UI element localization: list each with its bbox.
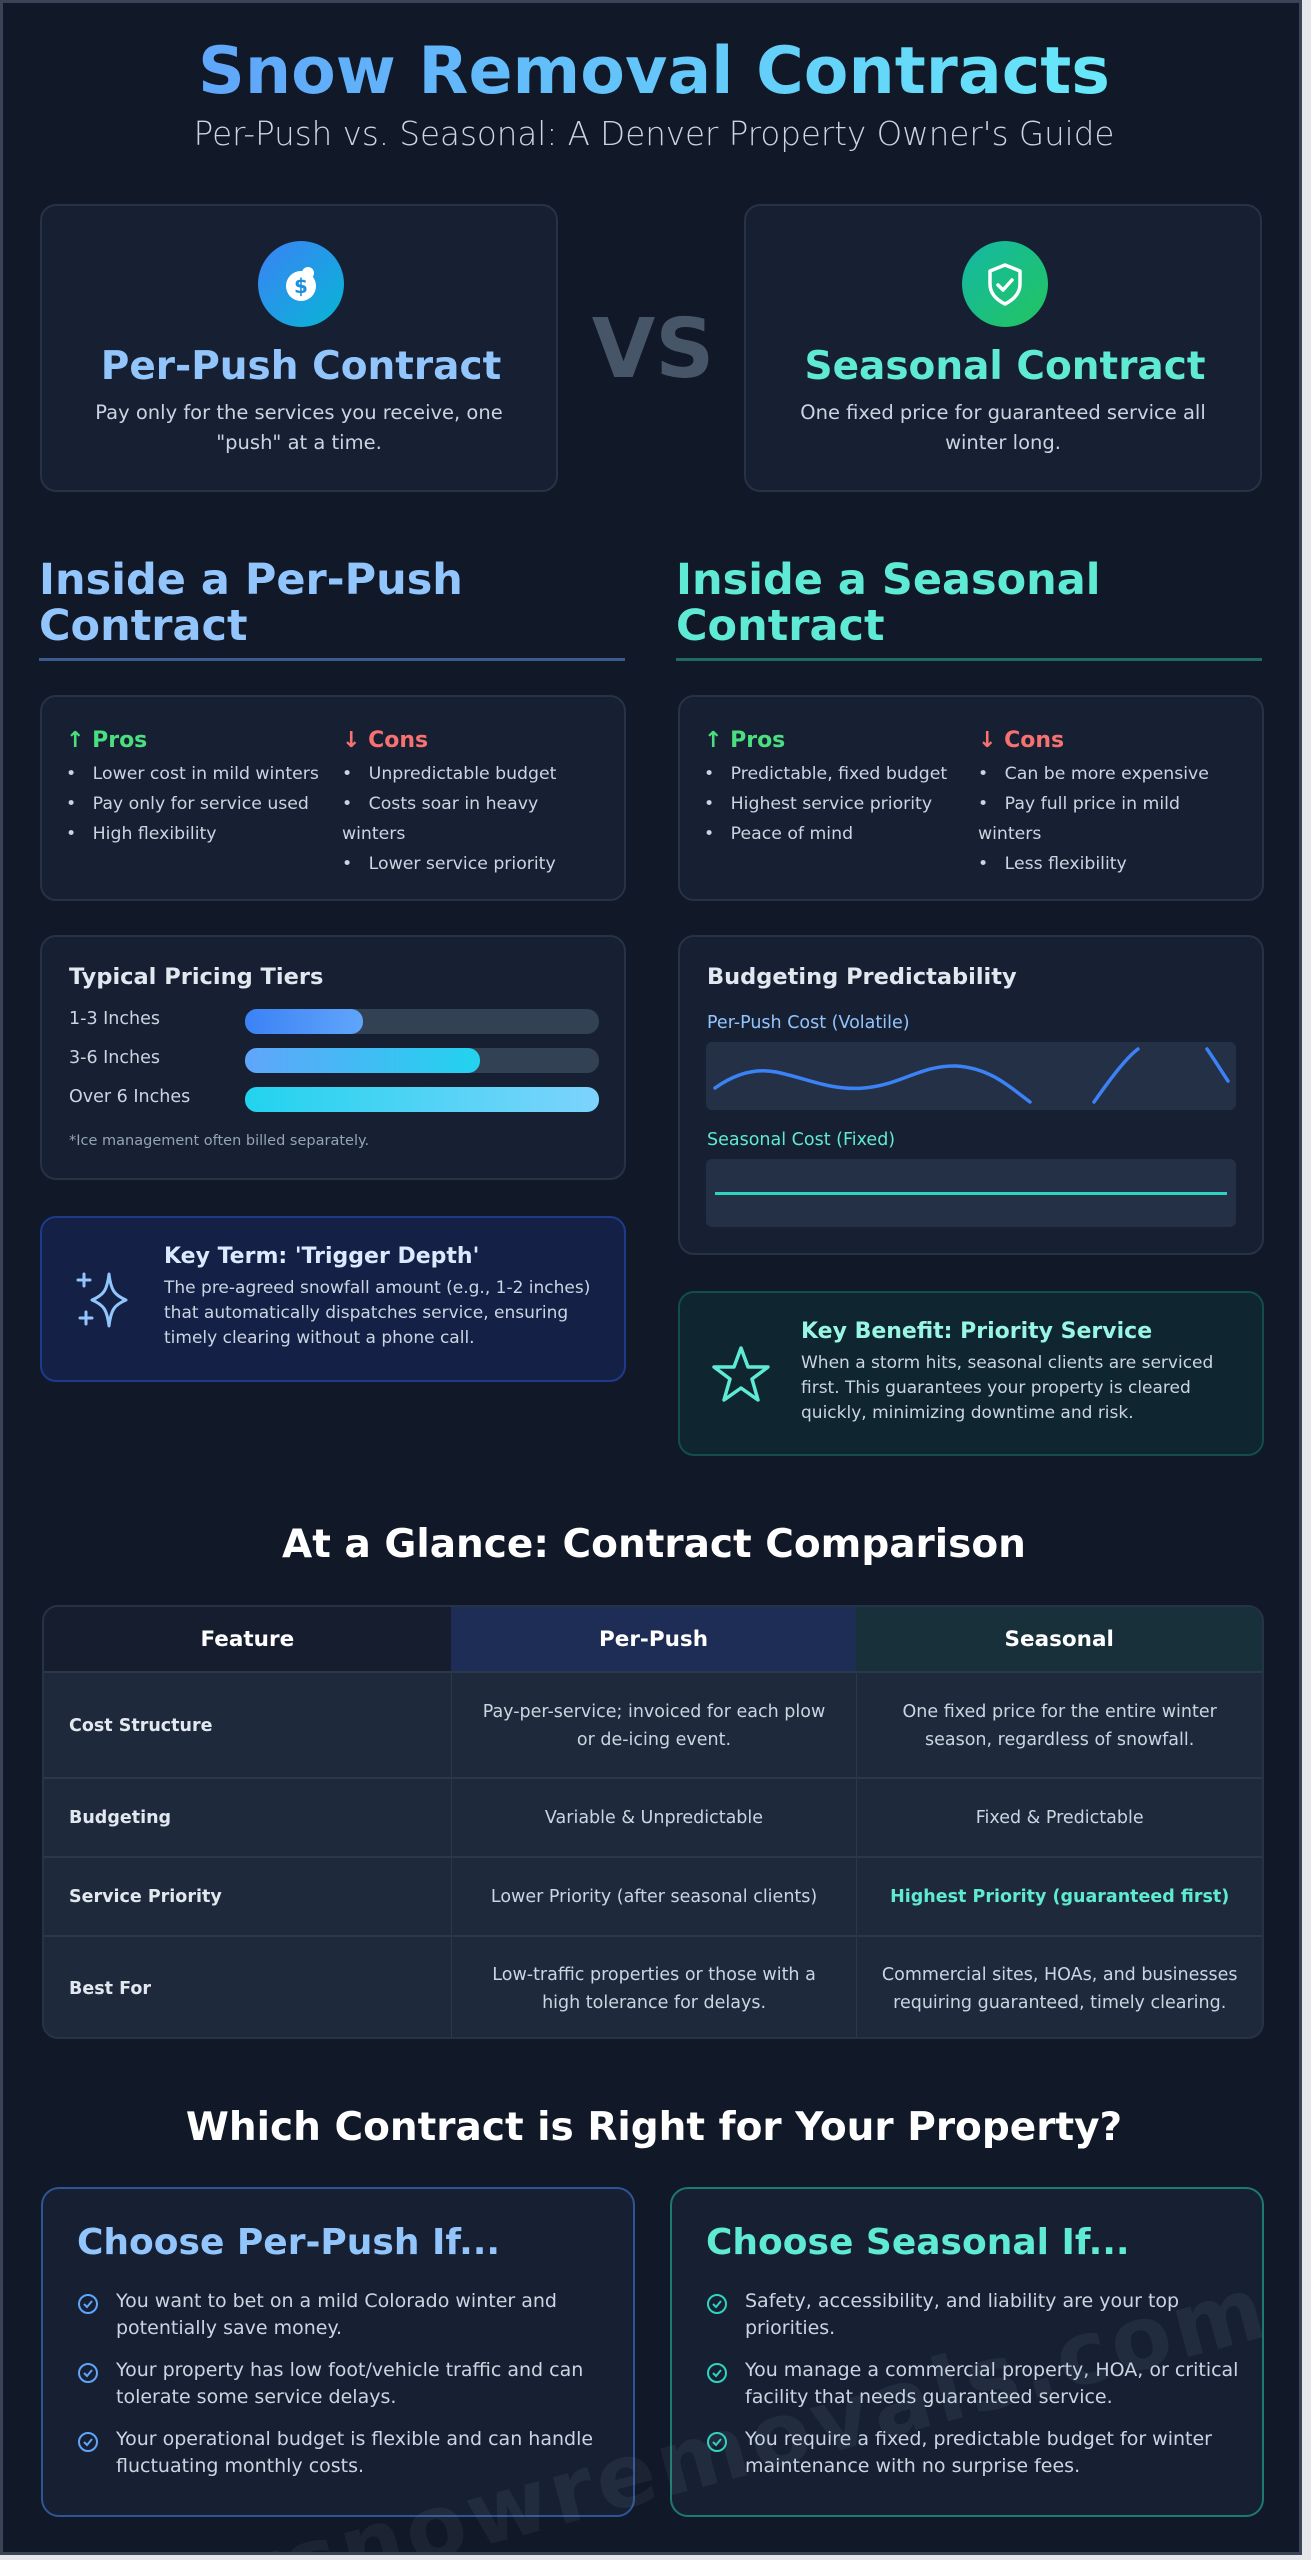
- pros: • Predictable, fixed budget: [704, 764, 947, 784]
- title: Key Term: 'Trigger Depth': [164, 1244, 479, 1269]
- panel: budgeting predictability: [678, 935, 1264, 1255]
- cons: • Can be more expensive: [978, 764, 1209, 784]
- comparison table: [42, 1605, 1264, 2039]
- pros: • High flexibility: [66, 824, 217, 844]
- cons: • Unpredictable budget: [342, 764, 556, 784]
- pros: [66, 728, 319, 844]
- cons: ↓ Cons: [342, 728, 428, 753]
- icon: star: [712, 1346, 770, 1402]
- item: Your property has low foot/vehicle traffic and can tolerate some service delays.: [116, 2359, 583, 2408]
- heading: inside per-push: [39, 555, 463, 651]
- heading: Per-Push Contract: [101, 344, 501, 389]
- table header: [44, 1607, 1114, 1671]
- panel: seasonal card: [744, 204, 1262, 492]
- icon: sparkles: [76, 1272, 128, 1328]
- cons: • Costs soar in heavy winters: [342, 794, 538, 844]
- label: Per-Push Cost (Volatile): [707, 1013, 910, 1033]
- pros: [704, 728, 947, 844]
- icon: shield: [962, 241, 1048, 327]
- table header: Feature: [200, 1626, 294, 1652]
- row: budgeting: Variable & Unpredictable: [545, 1808, 763, 1828]
- cons: • Pay full price in mild winters: [978, 794, 1180, 844]
- bar chart: 3-6 Inches: [69, 1048, 160, 1068]
- row: best for: [44, 1935, 1262, 2041]
- body: The pre-agreed snowfall amount (e.g., 1-2 inches) that automatically dispatches service, ensuring timely clearing without a phone call.: [164, 1278, 590, 1348]
- row: budgeting: Budgeting: [69, 1808, 171, 1828]
- table header: Per-Push: [599, 1626, 708, 1652]
- item: You require a fixed, predictable budget for winter maintenance with no surprise fees.: [745, 2428, 1212, 2477]
- row: service priority: Highest Priority (guaranteed first): [890, 1887, 1229, 1907]
- row: cost structure: One fixed price for the entire winter season, regardless of snowfall.: [902, 1702, 1217, 1750]
- row: cost structure: [44, 1671, 1262, 1778]
- bar chart: 1-3 Inches: [69, 1009, 160, 1029]
- panel: seasonal pros/cons: [678, 695, 1264, 901]
- icon: dollar: $: [294, 274, 308, 298]
- item: Your operational budget is flexible and can handle fluctuating monthly costs.: [116, 2428, 593, 2477]
- row: service priority: Service Priority: [69, 1887, 222, 1907]
- callout: key benefit: [678, 1291, 1264, 1456]
- cons: [342, 728, 556, 874]
- icon: dollar: [258, 241, 344, 327]
- cons: • Lower service priority: [342, 854, 556, 874]
- row: cost structure: Pay-per-service; invoiced for each plow or de-icing event.: [483, 1702, 825, 1750]
- subtitle: Per-Push vs. Seasonal: A Denver Property Owner's Guide: [194, 115, 1114, 153]
- panel: choose seasonal: [670, 2187, 1264, 2517]
- description: One fixed price for guaranteed service all winter long.: [800, 401, 1206, 454]
- chart: fixed line: [706, 1159, 1236, 1227]
- row: service priority: Lower Priority (after seasonal clients): [491, 1887, 817, 1907]
- heading: Choose Per-Push If...: [77, 2222, 500, 2263]
- heading: Seasonal Contract: [804, 344, 1206, 389]
- pros: • Peace of mind: [704, 824, 853, 844]
- panel: per-push card: [40, 204, 558, 492]
- title: Snow Removal Contracts: [198, 34, 1110, 109]
- pros: • Pay only for service used: [66, 794, 309, 814]
- cons: • Less flexibility: [978, 854, 1127, 874]
- heading: Typical Pricing Tiers: [69, 964, 323, 990]
- item: You want to bet on a mild Colorado winter and potentially save money.: [116, 2290, 557, 2339]
- heading: inside per-push: Contract: [39, 601, 248, 651]
- row: cost structure: Cost Structure: [69, 1716, 212, 1736]
- item: You manage a commercial property, HOA, or critical facility that needs guaranteed service.: [745, 2359, 1238, 2408]
- row: budgeting: [44, 1777, 1262, 1857]
- cons: [978, 728, 1209, 874]
- heading: inside per-push: Inside a Per-Push: [39, 555, 463, 605]
- panel: pricing tiers: [40, 935, 626, 1180]
- heading: Budgeting Predictability: [707, 964, 1017, 990]
- item: Safety, accessibility, and liability are your top priorities.: [745, 2290, 1179, 2339]
- label: Seasonal Cost (Fixed): [707, 1130, 895, 1150]
- pros: ↑ Pros: [66, 728, 147, 753]
- row: service priority: [44, 1856, 1262, 1936]
- row: best for: Commercial sites, HOAs, and businesses requiring guaranteed, timely clearing.: [882, 1965, 1238, 2013]
- pros: ↑ Pros: [704, 728, 785, 753]
- bar chart: [69, 1009, 599, 1112]
- pros: • Lower cost in mild winters: [66, 764, 319, 784]
- heading: inside seasonal: [676, 555, 1100, 651]
- cons: ↓ Cons: [978, 728, 1064, 753]
- row: budgeting: Fixed & Predictable: [976, 1808, 1144, 1828]
- VS label: VS: [592, 302, 714, 397]
- heading: Choose Seasonal If...: [706, 2222, 1130, 2263]
- table header: Seasonal: [1005, 1626, 1114, 1652]
- footnote: *Ice management often billed separately.: [69, 1133, 369, 1149]
- heading: inside seasonal: Inside a Seasonal: [676, 555, 1100, 605]
- title: Key Benefit: Priority Service: [801, 1319, 1152, 1344]
- row: best for: Low-traffic properties or those with a high tolerance for delays.: [492, 1965, 816, 2013]
- pros: • Highest service priority: [704, 794, 932, 814]
- chart: volatile line: [706, 1042, 1236, 1110]
- heading: at a glance: At a Glance: Contract Comparison: [282, 1522, 1026, 1567]
- description: Pay only for the services you receive, one "push" at a time.: [95, 401, 503, 454]
- heading: which contract: Which Contract is Right for Your Property?: [186, 2105, 1122, 2150]
- bar chart: Over 6 Inches: [69, 1087, 190, 1107]
- row: best for: Best For: [69, 1979, 151, 1999]
- heading: inside seasonal: Contract: [676, 601, 885, 651]
- panel: per-push pros/cons: [40, 695, 626, 901]
- body: When a storm hits, seasonal clients are serviced first. This guarantees your property is cleared quickly, minimizing downtime and risk.: [801, 1353, 1213, 1423]
- panel: choose per-push: [41, 2187, 635, 2517]
- callout: key term: [40, 1216, 626, 1382]
